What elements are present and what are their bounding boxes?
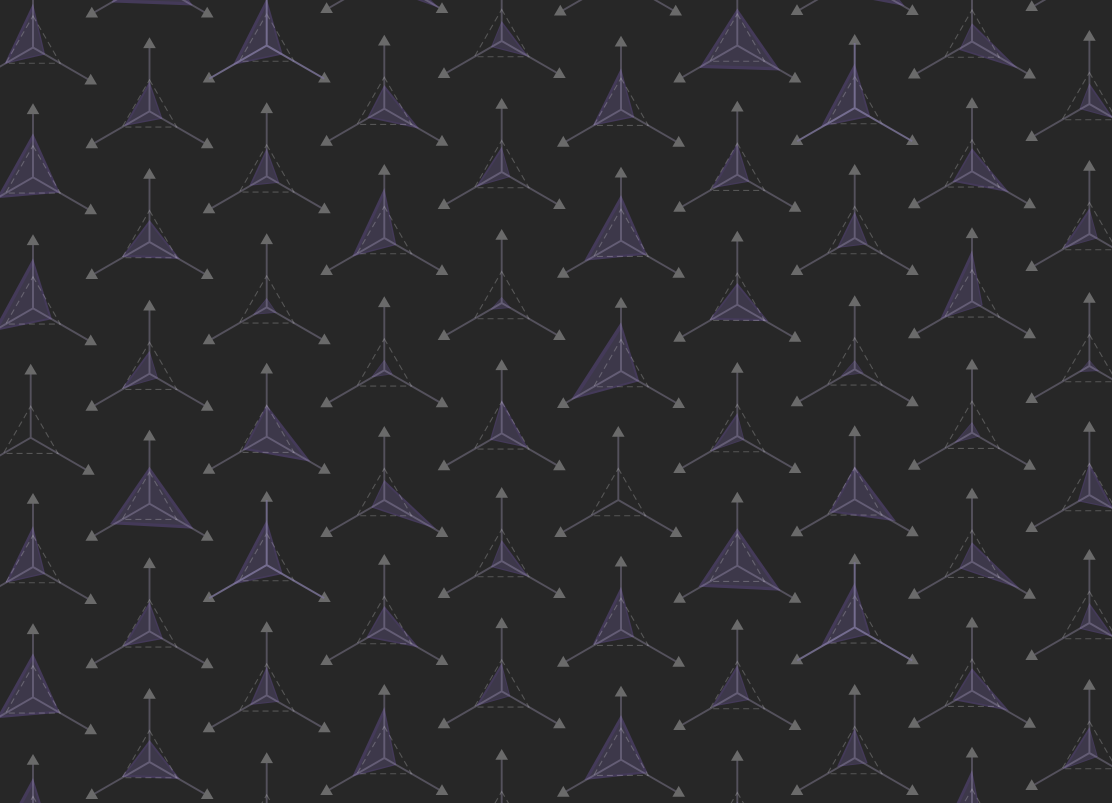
radar chart col 9 row 5 [1025, 549, 1112, 660]
radar chart col 5 row 2 [557, 167, 685, 278]
radar chart col 5 row 3 [557, 297, 685, 408]
radar chart col 8 row 4 [908, 488, 1036, 599]
radar chart col 1 row 2 [86, 168, 214, 279]
radar chart col 0 row 4 [0, 493, 97, 604]
radar chart col 0 row 1 [0, 103, 97, 214]
radar chart col 8 row 5 [908, 617, 1036, 728]
radar chart col 1 row 0 [86, 0, 214, 18]
radar chart col 4 row 6 [438, 749, 566, 803]
radar chart col 3 row 2 [320, 164, 448, 275]
radar chart col 9 row 4 [1025, 421, 1112, 532]
radar chart col 6 row 4 [673, 492, 801, 603]
radar chart col 2 row 3 [203, 363, 331, 474]
radar chart col 1 row 5 [86, 557, 214, 668]
radar chart col 0 row 3 (empty) [0, 364, 95, 475]
radar chart col 3 row 3 [320, 296, 448, 407]
radar chart col 5 row 4 (empty) [554, 426, 682, 537]
radar chart col 5 row 6 [557, 686, 685, 797]
radar chart col 7 row 1 (highlighted) [791, 34, 919, 145]
radar chart col 3 row 6 [320, 684, 448, 795]
radar chart col 4 row 4 [438, 487, 566, 598]
radar chart col 4 row 2 [438, 229, 566, 340]
radar chart col 3 row 4 [320, 426, 448, 537]
radar chart col 0 row 2 [0, 234, 97, 345]
radar chart col 4 row 5 [438, 617, 566, 728]
radar chart col 0 row 0 [0, 0, 97, 84]
radar chart col 2 row 0 (highlighted) [203, 0, 331, 82]
radar chart col 3 row 0 [320, 0, 448, 13]
radar chart col 0 row 5 [0, 623, 97, 734]
radar chart col 4 row 1 [438, 98, 566, 209]
radar chart col 9 row 2 [1025, 160, 1112, 271]
radar chart col 6 row 0 [673, 0, 801, 82]
radar chart col 2 row 4 (highlighted) [203, 491, 331, 602]
radar chart col 8 row 1 [908, 97, 1036, 208]
radar chart col 1 row 6 [86, 688, 214, 799]
radar chart col 6 row 1 [673, 101, 801, 212]
radar chart col 3 row 5 [320, 554, 448, 665]
radar chart col 7 row 3 [791, 295, 919, 406]
radar chart col 2 row 2 [203, 233, 331, 344]
radar chart col 4 row 0 [438, 0, 566, 78]
radar chart col 6 row 3 [673, 362, 801, 473]
radar chart col 9 row 1 [1025, 30, 1112, 141]
radar chart col 8 row 0 [908, 0, 1036, 78]
radar chart col 0 row 6 [0, 754, 97, 803]
radar chart col 4 row 3 [438, 359, 566, 470]
radar chart col 8 row 3 [908, 359, 1036, 470]
radar chart col 3 row 1 [320, 35, 448, 146]
radar chart col 5 row 5 [557, 556, 685, 667]
radar chart col 1 row 3 [86, 300, 214, 411]
radar chart col 6 row 5 [673, 619, 801, 730]
radar chart col 2 row 1 [203, 102, 331, 213]
radar chart col 2 row 6 [203, 752, 331, 803]
radar chart col 8 row 6 [908, 747, 1036, 803]
radar chart col 7 row 0 [791, 0, 919, 15]
radar chart col 9 row 6 [1025, 679, 1112, 790]
radar chart col 2 row 5 [203, 621, 331, 732]
radar chart col 5 row 0 (empty) [554, 0, 682, 16]
radar chart col 9 row 0 [1025, 0, 1112, 11]
radar chart col 9 row 3 [1025, 292, 1112, 403]
radar chart col 5 row 1 [557, 36, 685, 147]
radar chart col 1 row 1 [86, 37, 214, 148]
radar chart col 7 row 2 [791, 164, 919, 275]
radar chart col 1 row 4 [86, 430, 214, 541]
radar chart col 7 row 5 (highlighted) [791, 553, 919, 664]
radar chart col 7 row 4 [791, 425, 919, 536]
radar chart col 6 row 6 [673, 750, 801, 803]
radar chart col 7 row 6 [791, 684, 919, 795]
radar chart col 8 row 2 [908, 227, 1036, 338]
radar chart col 6 row 2 [673, 231, 801, 342]
